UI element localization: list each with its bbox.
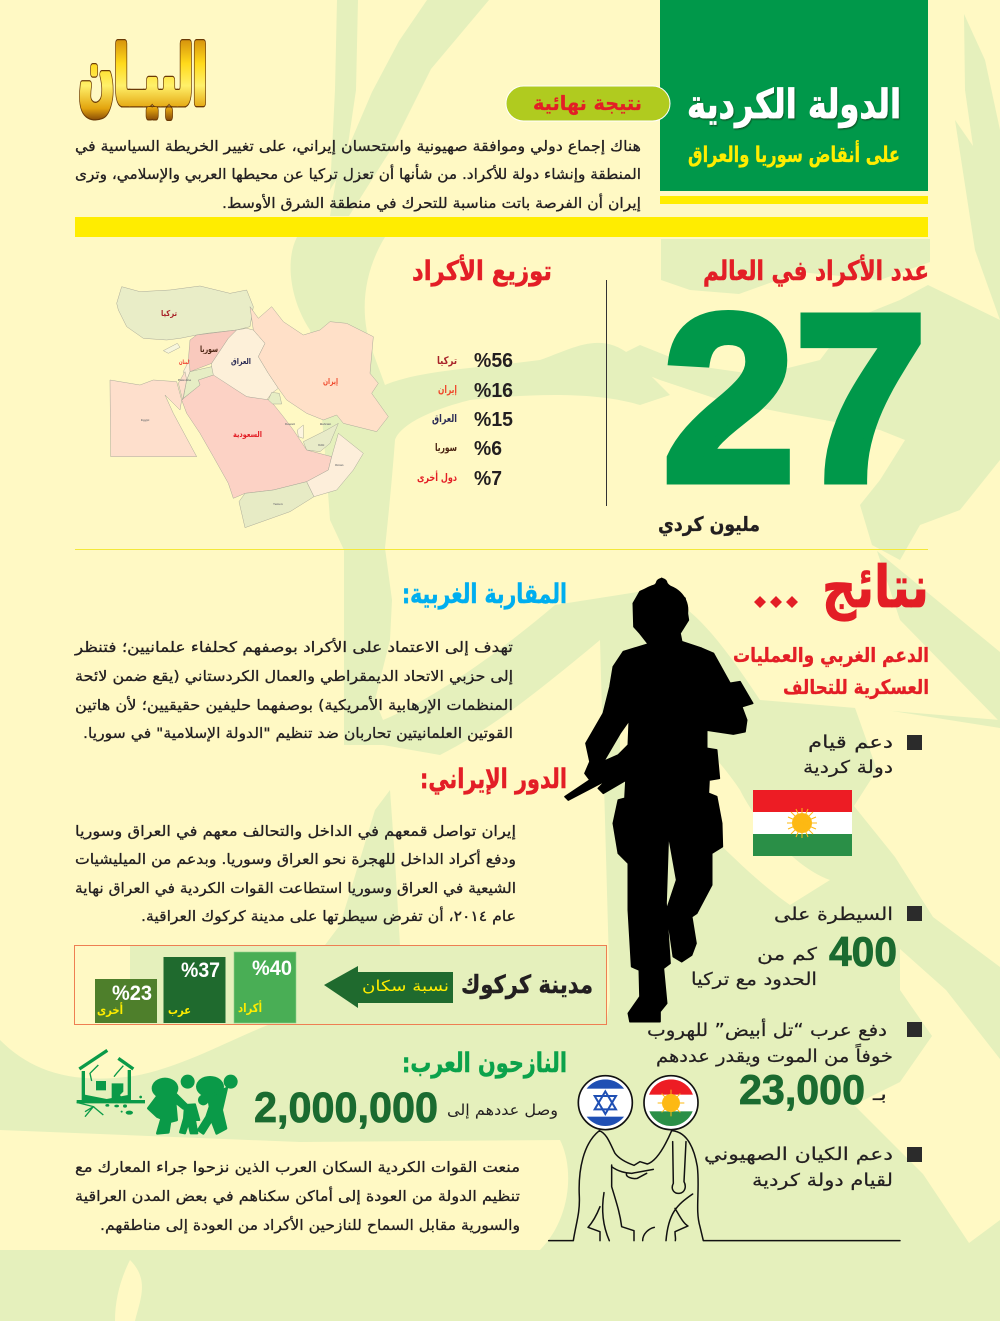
bullet: support for a Kurdish state: دعم قيام [808,733,893,753]
bullet: control of 400 km [691,905,922,990]
figure: two million displaced [254,1084,558,1132]
heading: Western approach: المقاربة الغربية: [402,579,567,610]
paragraph: Iranian role: الشيعية في العراق وسوريا استطاعت القوات الكردية في العراق نهاية [75,881,516,897]
map labels: UAE [318,443,324,447]
arrow: population ratio: نسبة سكان [362,977,449,995]
distribution list: إيران [438,384,457,396]
map labels: Kuwait [285,422,295,426]
paragraph: Iranian role: ودفع أكراد الداخل للهجرة نحو العراق وسوريا. وبدعم من الميليشيات [75,849,516,868]
map labels: Oman [335,463,344,467]
heading: distribution: توزيع الأكراد [412,254,552,287]
paragraph: displaced Arabs: تنظيم الدولة من العودة إلى أماكن سكناهم في بعض المدن العراقية [75,1186,520,1205]
block: Arabs 37: عرب [168,1003,191,1017]
caption: million Kurds: مليون كردي [658,512,760,537]
intro paragraph: هناك إجماع دولي وموافقة صهيونية واستحسان إيراني، على تغيير الخريطة السياسية في [75,139,641,155]
label pill: final result [506,86,670,121]
map labels: لبنان [179,359,189,366]
block: Others 23 [95,979,157,1023]
figure: two million displaced: وصل عددهم إلى [447,1101,558,1119]
paragraph: Western approach: القوتين العلمانيتين تحاربان ضد تنظيم "الدولة الإسلامية" في سوريا. [83,726,513,742]
block: Kurds 40: %40 [252,957,292,980]
distribution list: العراق [432,413,457,425]
bullet: displacement of Tal Abyad Arabs: 23,000 [739,1066,865,1113]
map labels: تركيا [161,309,177,318]
heading: Iranian role: الدور الإيراني: [420,764,567,795]
distribution list: %7 [474,467,502,490]
map labels: Egypt [141,418,149,422]
heading: results: نتائج [822,553,929,622]
heading: results [754,553,929,622]
results subheading: العسكرية للتحالف [783,675,929,699]
map labels [141,309,344,506]
bullet: control of 400 km: 400 [829,928,897,975]
block: Others 23: %23 [112,982,152,1005]
paragraph: Western approach: تهدف إلى الاعتماد على الأكراد بوصفهم كحلفاء علمانيين؛ فتنظر [74,638,513,656]
bullet: displacement of Tal Abyad Arabs [647,1018,922,1113]
bullet: control of 400 km: السيطرة على [774,905,893,925]
bullet: control of 400 km: الحدود مع تركيا [691,970,817,990]
bullet: displacement of Tal Abyad Arabs: بـ [872,1085,887,1105]
intro paragraph: إيران أن الفرصة باتت مناسبة للتحرك في منطقة الشرق الأوسط. [222,193,641,212]
paragraph: displaced Arabs: منعت القوات الكردية السكان العرب الذين نزحوا جراء المعارك مع [75,1160,520,1176]
intro paragraph [75,139,641,212]
paragraph: Iranian role [75,824,516,925]
logo: gold wordmark: البيـان [79,31,207,122]
soldier silhouette [565,578,753,1022]
Kurdistan flag [753,790,852,856]
map labels: Bahrain [320,422,331,426]
bullet: control of 400 km: كم من [757,945,818,965]
main title: الدولة الكردية [687,82,901,128]
bullet: Zionist entity support: دعم الكيان الصهيوني [704,1145,893,1165]
distribution list: %16 [474,379,513,402]
distribution list: تركيا [437,355,457,367]
arrow: population ratio [324,966,453,1008]
paragraph: Western approach: المنظمات الإرهابية الأمريكية) بوصفهما حليفين حقيقيين؛ لأن هاتين [75,696,513,714]
distribution list: سوريا [435,442,457,454]
paragraph: Iranian role: عام ٢٠١٤، أن تفرض سيطرتها على مدينة كركوك العراقية. [141,906,516,925]
logo: gold wordmark [79,31,207,122]
map labels: Yemen [273,502,283,506]
bullet: support for a Kurdish state: دولة كردية [803,758,893,778]
heading: displaced Arabs: النازحون العرب: [402,1048,567,1079]
distribution list: %15 [474,408,513,431]
bullet: Zionist entity support [704,1145,922,1191]
results subheading: الدعم الغربي والعمليات [733,643,929,668]
distribution list: %6 [474,437,502,460]
paragraph: Western approach [74,638,513,742]
panel: Kirkuk population [74,946,606,1024]
block: Arabs 37 [164,957,226,1023]
map labels: Palestine [178,378,192,382]
map labels: العراق [231,357,251,366]
distribution list: دول أخرى [417,470,457,484]
paragraph: displaced Arabs: والسورية مقابل السماح للنازحين الأكراد من العودة إلى مناطقهم. [100,1216,520,1234]
heading: number of Kurds: عدد الأكراد في العالم [703,254,929,287]
bullet: displacement of Tal Abyad Arabs: دفع عرب “تل أبيض” للهروب [647,1018,887,1041]
paragraph: Iranian role: إيران تواصل قمعهم في الداخل والتحالف معهم في العراق وسوريا [75,824,516,840]
header green panel [660,0,928,204]
distribution list: %56 [474,349,513,372]
paragraph: Western approach: إلى حزبي الاتحاد الديمقراطي والعمال الكردستاني (يقع ضمن لائحة [75,669,513,685]
Kurdish flag head [644,1076,698,1130]
logo: gold wordmark: البيـان [79,31,207,122]
block: Others 23: أخرى [97,1002,123,1017]
results subheading [733,643,929,699]
figure: two million displaced: 2,000,000 [254,1084,438,1132]
heading: Kirkuk city: مدينة كركوك [461,970,593,1000]
intro paragraph: المنطقة وإنشاء دولة للأكراد. من شأنها أن تعزل تركيا عن محيطها العربي والإسلامي، وترى [75,164,641,183]
big number 27: 27 [663,266,927,531]
handshake illustration [549,1076,900,1241]
map labels: السعودية [233,430,262,439]
icon: destroyed house and displaced family [77,1050,238,1133]
block: Kurds 40 [234,952,296,1023]
map labels: سوريا [200,345,218,355]
bullet: support for a Kurdish state [803,733,922,778]
block: Kurds 40: أكراد [238,1000,262,1015]
bullet: displacement of Tal Abyad Arabs: خوفاً من الموت ويقدر عددهم [656,1043,893,1067]
block: Arabs 37: %37 [181,959,220,982]
distribution list [417,349,513,490]
paragraph: displaced Arabs [75,1160,520,1234]
map of the Middle East [110,286,388,528]
bullet: Zionist entity support: لقيام دولة كردية [752,1171,893,1191]
Israeli flag head [578,1076,633,1130]
label pill: final result: نتيجة نهائية [533,91,642,115]
map labels: إيران [323,377,338,386]
subtitle: على أنقاض سوريا والعراق [688,139,900,168]
